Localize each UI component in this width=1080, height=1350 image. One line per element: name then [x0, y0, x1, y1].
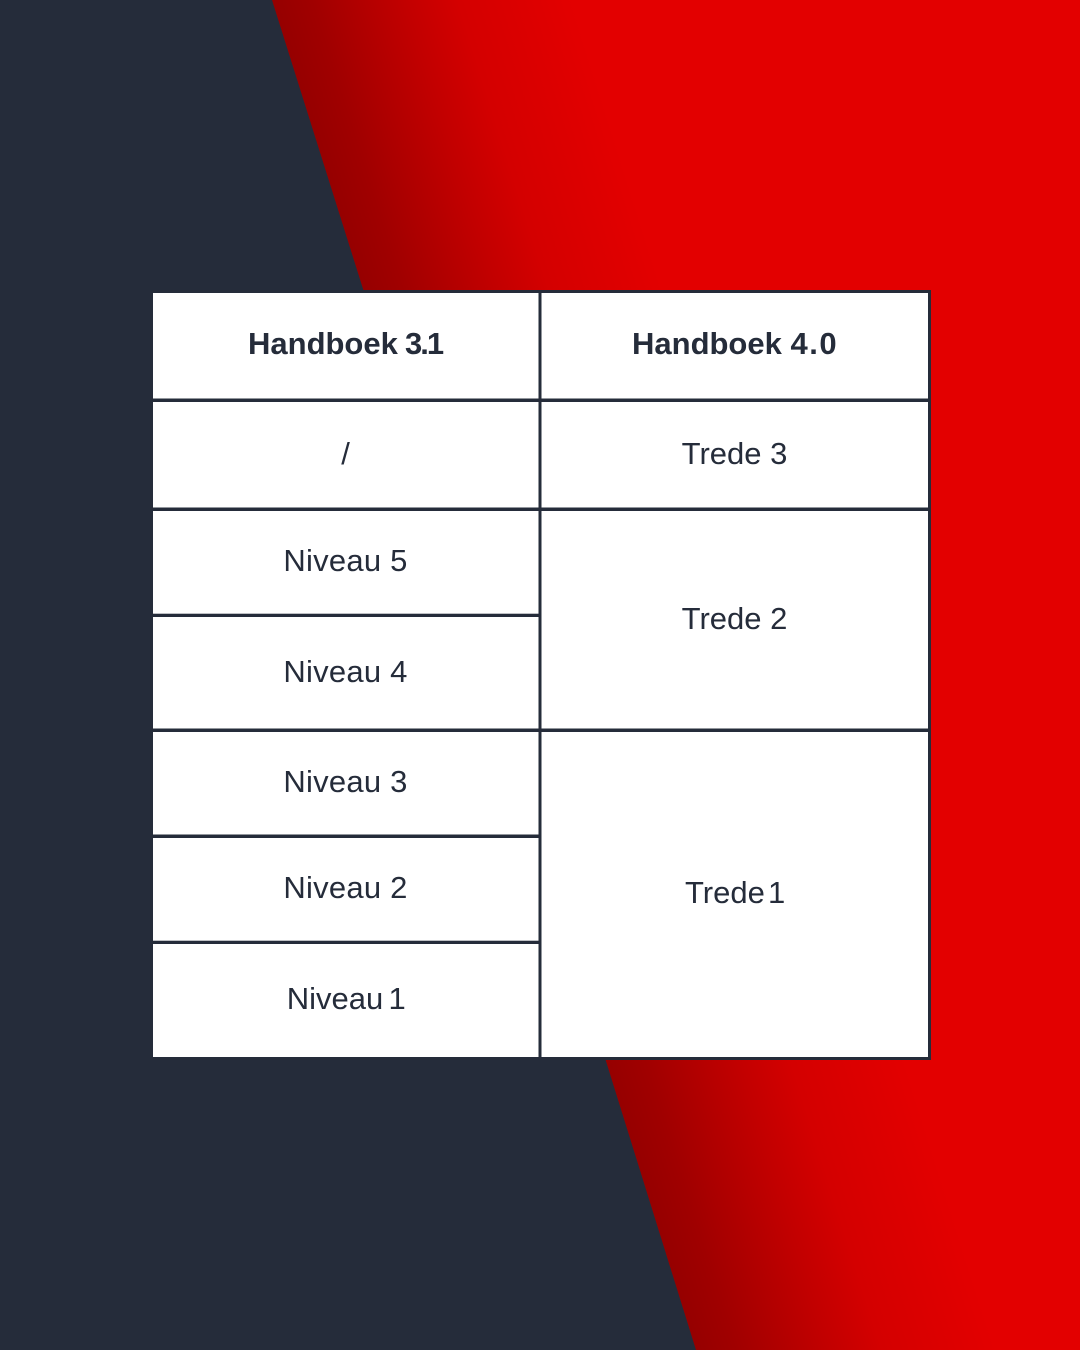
table frame: [152, 290, 931, 1060]
cell: Trede 1: [542, 732, 928, 1057]
cell: Handboek 3.1 header: [153, 293, 538, 398]
cell: Trede 2: [542, 511, 928, 728]
cell: Niveau 2: Niveau 2: [283, 870, 408, 905]
cell: Niveau 1: Niveau: [287, 981, 383, 1016]
cell: Niveau 1: 1: [388, 981, 406, 1016]
background: red diagonal gradient top: [272, 0, 1080, 292]
cell: Trede 3: Trede 3: [682, 436, 787, 471]
cell: Niveau 5: Niveau 5: [283, 543, 408, 578]
cell: Niveau 2: [153, 838, 538, 941]
cell: Handboek 4.0 header: [542, 293, 928, 398]
cell: empty slash: /: [341, 436, 350, 471]
cell: Niveau 4: [153, 617, 538, 728]
cell: Handboek 4.0 header: Handboek: [632, 326, 782, 361]
cell: Niveau 1: [153, 944, 538, 1057]
cell: Handboek 3.1 header: 3.1: [405, 326, 444, 361]
cell: Niveau 3: Niveau 3: [283, 764, 408, 799]
cell: Niveau 3: [153, 732, 538, 834]
background: red strip right of table: [925, 285, 1080, 1065]
cell: empty slash: [153, 402, 538, 508]
cell: Handboek 4.0 header: 4.0: [790, 326, 838, 361]
cell: Trede 1: Trede: [685, 875, 765, 910]
cell: Handboek 3.1 header: Handboek: [248, 326, 398, 361]
cell: Trede 1: 1: [768, 875, 785, 910]
cell: Niveau 5: [153, 511, 538, 614]
cell: Trede 3: [542, 402, 928, 508]
cell: Niveau 4: Niveau 4: [283, 654, 408, 689]
comparison table: [152, 290, 931, 1060]
cell: Trede 2: Trede 2: [682, 601, 787, 636]
background: red diagonal gradient bottom: [605, 1058, 1080, 1350]
